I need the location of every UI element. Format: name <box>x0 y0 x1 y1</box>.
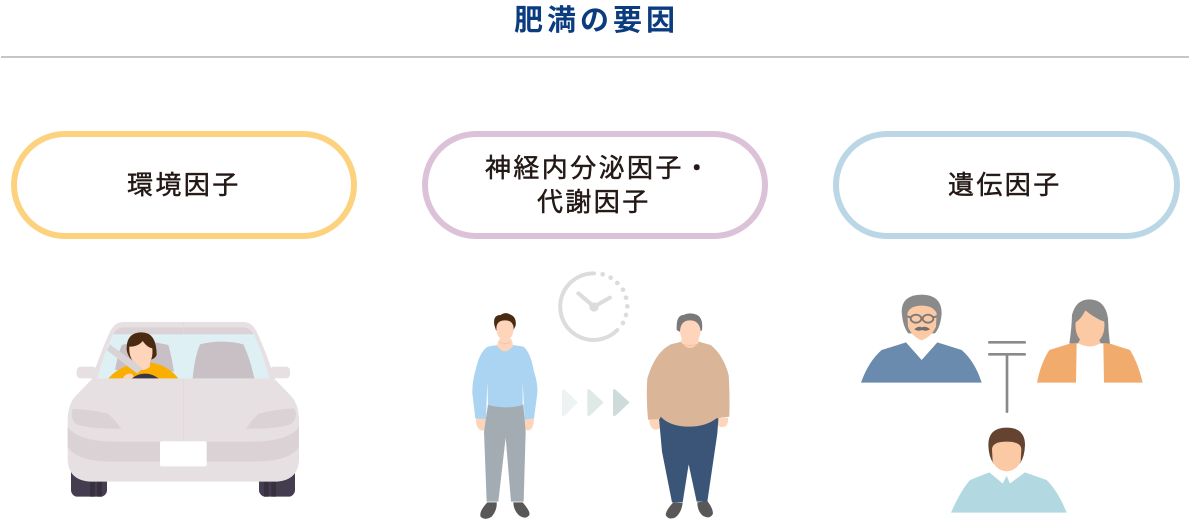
panel: neuroendocrine and metabolic factors pill: 神経内分泌因子・ <box>485 153 712 183</box>
icon: clock <box>560 272 630 340</box>
panel: environmental factors pill <box>14 134 354 236</box>
icon: mother <box>1037 299 1143 383</box>
panel: genetic factors pill: 遺伝因子 <box>948 170 1062 200</box>
title: 肥満の要因 <box>514 4 679 37</box>
panel: genetic factors pill <box>836 134 1177 236</box>
icon: child <box>951 428 1067 513</box>
icon: equals and descent connector <box>989 342 1025 412</box>
icon: slim man <box>472 313 537 519</box>
panel: neuroendocrine and metabolic factors pill: 代謝因子 <box>537 187 651 217</box>
icon: father <box>861 295 982 383</box>
icon: progression arrows <box>562 389 630 416</box>
panel: neuroendocrine and metabolic factors pill <box>425 134 765 236</box>
icon: car with driver <box>68 322 299 497</box>
panel: environmental factors pill: 環境因子 <box>127 170 241 200</box>
icon: overweight older man <box>647 313 730 519</box>
